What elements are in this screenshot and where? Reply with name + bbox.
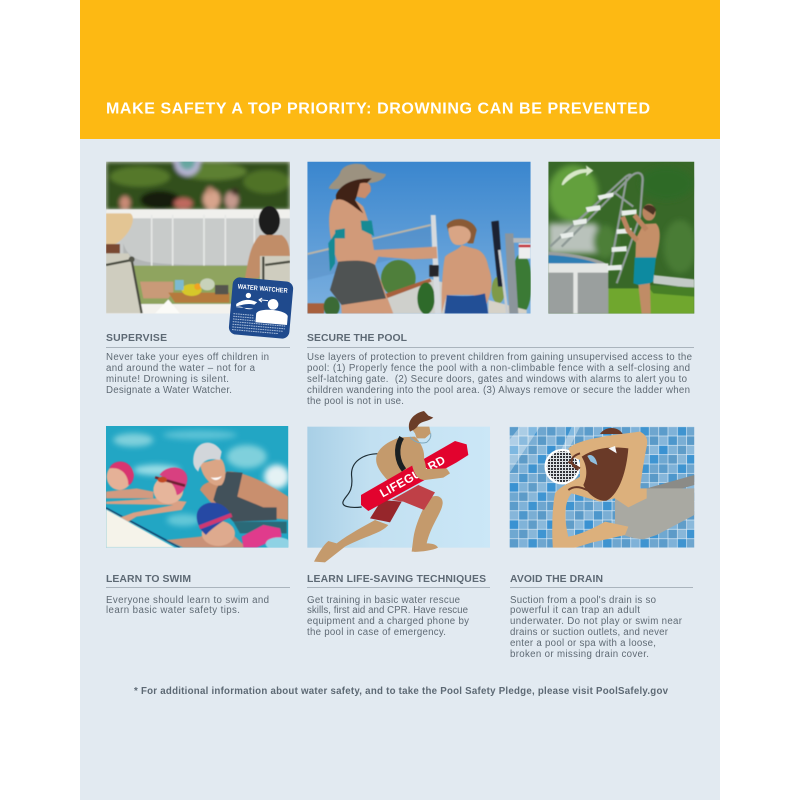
arrow [562,165,593,185]
front leg [412,496,443,552]
boy [442,219,492,314]
text block: Avoid the drain: drains or suction outlets, and never [510,627,669,638]
text block: Learn life-saving techniques: Get training in basic water rescue [307,595,460,606]
body and arms [552,432,647,554]
panel: page background [80,0,720,800]
header banner [80,0,720,139]
instructor [193,443,288,533]
text block: Secure the pool: self-latching gate. (2) Secure doors, gates and windows with alarms to alert you to [307,374,687,385]
text block: Secure the pool: the pool is not in use. [307,396,404,407]
text block: Supervise: Designate a Water Watcher. [106,385,232,396]
heading: Supervise: SUPERVISE [106,333,167,344]
heading: Avoid the drain: AVOID THE DRAIN [510,574,603,585]
text block: Learn to swim [106,595,269,616]
text block: Learn to swim: learn basic water safety tips. [106,605,240,616]
photo: man removing pool ladder [548,162,697,314]
text block: Learn life-saving techniques: equipment and a charged phone by [307,616,469,627]
icon: drain cover [546,450,579,483]
woman with sun hat in chair [106,213,173,313]
text block: Avoid the drain: broken or missing drain cover. [510,649,649,660]
text block: Supervise [106,352,269,396]
illustration: swimmer with hair caught in drain [509,427,694,554]
icon: Water Watcher tag [228,277,294,339]
photo: mother and boy at pool fence [307,162,532,317]
text block: Avoid the drain: enter a pool or spa with a loose, [510,638,656,649]
photo: adults supervising swimmers with Water Watcher tag [106,151,294,339]
pool edge [106,509,175,548]
text block: Avoid the drain: powerful it can trap an adult [510,605,640,616]
torso and rear arm [376,437,424,497]
text block: Learn to swim: Everyone should learn to swim and [106,595,269,606]
background houses and trees [307,253,532,317]
heading: Secure the pool: SECURE THE POOL [307,333,408,344]
ladder [550,173,643,283]
text block: Learn life-saving techniques [307,595,469,638]
illustration: lifeguard running with rescue tube [307,411,490,562]
pool wall [548,252,608,314]
text block: Secure the pool [307,352,692,407]
child one, pink cap [106,462,153,498]
footnote: * For additional information about water safety, and to take the Pool Safety Pledge, please visit PoolSafely.gov [134,686,669,697]
text block: Secure the pool: children wandering into the pool area. (3) Always remove or secure the ladder when [307,385,690,396]
text block: Avoid the drain [510,595,683,660]
strap [398,437,404,470]
rear leg [314,520,388,562]
rescue tube [361,441,468,511]
title: MAKE SAFETY A TOP PRIORITY: DROWNING CAN BE PREVENTED [106,100,650,118]
man [623,204,660,314]
text block: Supervise: minute! Drowning is silent. [106,374,229,385]
front arm [412,447,450,480]
heading: Learn to swim: LEARN TO SWIM [106,574,191,585]
hair [568,428,628,501]
swimsuit legs [646,475,694,488]
text block: Supervise: and around the water – not for a [106,363,256,374]
photo: children learning to swim with instructor [106,426,291,551]
rope [343,454,397,507]
head [409,411,433,443]
text block: Learn life-saving techniques: skills, first aid and CPR. Have rescue [307,605,468,616]
text block: Avoid the drain: Suction from a pool's drain is so [510,595,656,606]
woman [328,164,437,314]
text block: Avoid the drain: underwater. Do not play or swim near [510,616,683,627]
man seen from behind [245,206,290,289]
rescue tube: LIFEGUARD [377,453,448,500]
text block: Supervise: Never take your eyes off children in [106,352,269,363]
child three, blue cap [167,503,291,551]
text block: Secure the pool: Use layers of protection to prevent children from gaining unsupervised access to the [307,352,692,363]
heading: Learn life-saving techniques: LEARN LIFE-SAVING TECHNIQUES [307,574,486,585]
fence mesh and posts [307,215,531,314]
text block: Secure the pool: pool: (1) Properly fence the pool with a non-climbable fence with a self-closing and [307,363,690,374]
child two, pink cap and goggles [106,467,187,522]
tray with fruit [155,278,229,313]
shorts [370,485,435,522]
text block: Learn life-saving techniques: the pool in case of emergency. [307,627,446,638]
icon: Water Watcher tag: WATER WATCHER [237,284,288,295]
